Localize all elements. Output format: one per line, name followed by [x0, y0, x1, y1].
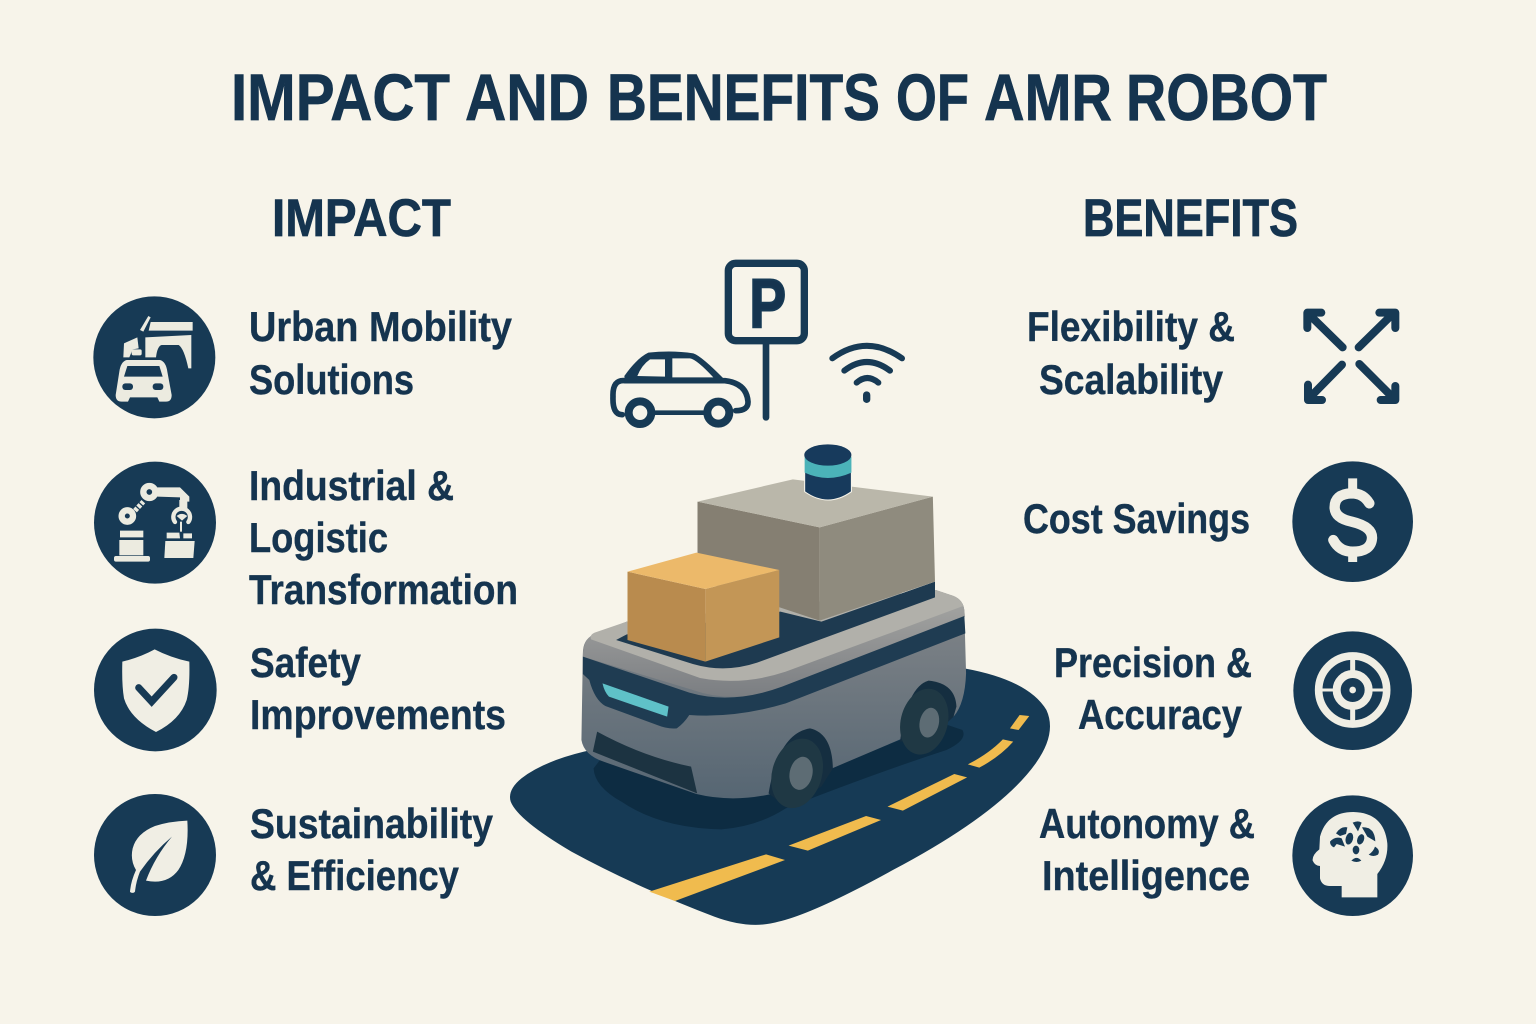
- label: precision and accuracy: Accuracy: [1078, 691, 1243, 738]
- icon: parking sign: [728, 263, 804, 417]
- label: precision and accuracy: Precision &: [1054, 639, 1252, 686]
- icon: target: [1293, 631, 1412, 750]
- label: flexibility and scalability: Flexibility &: [1027, 303, 1235, 350]
- panel: impact: [93, 189, 518, 916]
- title: AND: [465, 60, 589, 134]
- label: urban mobility solutions: [249, 303, 513, 403]
- label: flexibility and scalability: Scalability: [1039, 356, 1224, 403]
- robot body: [581, 582, 966, 798]
- label: autonomy and intelligence: Autonomy &: [1039, 800, 1255, 847]
- impact item: safety: [94, 629, 506, 751]
- icon: shield with check: [94, 629, 217, 751]
- icon: expanding arrows: [1307, 313, 1395, 400]
- icon: robot arm: [94, 462, 216, 584]
- icon: traffic vehicles: [93, 296, 215, 418]
- icon: dollar: [1292, 461, 1413, 582]
- label: industrial and logistic transformation: [249, 462, 518, 613]
- label: sustainability and efficiency: & Efficiency: [250, 852, 460, 899]
- front wheel: [764, 728, 833, 813]
- label: safety improvements: Improvements: [250, 691, 506, 738]
- lidar sensor: [804, 444, 851, 500]
- orange box: [627, 553, 779, 662]
- benefit item: autonomy: [1039, 795, 1413, 916]
- title: AMR: [984, 60, 1112, 134]
- icon: parking sign: P: [749, 264, 786, 342]
- icon: car: [613, 351, 748, 424]
- title: IMPACT: [231, 60, 450, 134]
- label: cost savings: Cost Savings: [1023, 495, 1250, 542]
- icon: leaf: [94, 794, 216, 916]
- icon group: car, parking sign, wifi: [613, 263, 902, 424]
- panel: benefits: [1023, 189, 1413, 916]
- label: autonomy and intelligence: Intelligence: [1042, 852, 1250, 899]
- label: safety improvements: [250, 639, 506, 738]
- label: industrial and logistic transformation: Transformation: [249, 566, 518, 613]
- rear wheel: [894, 681, 956, 759]
- label: sustainability and efficiency: [250, 800, 494, 899]
- title: [231, 60, 1327, 134]
- label: industrial and logistic transformation: Industrial &: [249, 462, 454, 509]
- heading: impact: IMPACT: [272, 189, 451, 248]
- title: OF: [896, 60, 969, 134]
- label: flexibility and scalability: [1027, 303, 1235, 403]
- title: ROBOT: [1126, 60, 1327, 134]
- label: industrial and logistic transformation: Logistic: [249, 514, 388, 561]
- large grey crate: [697, 479, 935, 621]
- title: BENEFITS: [607, 60, 880, 134]
- icon: head with brain: [1292, 795, 1413, 916]
- label: sustainability and efficiency: Sustainability: [250, 800, 494, 847]
- label: autonomy and intelligence: [1039, 800, 1255, 899]
- benefit item: cost savings: [1023, 461, 1413, 582]
- label: urban mobility solutions: Solutions: [249, 356, 414, 403]
- benefit item: flexibility: [1027, 303, 1395, 403]
- road: [510, 668, 1050, 925]
- heading: benefits: BENEFITS: [1083, 189, 1298, 248]
- illustration: AMR robot on road: [510, 444, 1050, 925]
- impact item: urban mobility: [93, 296, 513, 418]
- impact item: sustainability: [94, 794, 494, 916]
- label: precision and accuracy: [1054, 639, 1252, 738]
- impact item: industrial: [94, 462, 518, 613]
- icon: wifi: [832, 346, 902, 399]
- label: safety improvements: Safety: [250, 639, 362, 686]
- label: urban mobility solutions: Urban Mobility: [249, 303, 513, 350]
- benefit item: precision: [1054, 631, 1412, 750]
